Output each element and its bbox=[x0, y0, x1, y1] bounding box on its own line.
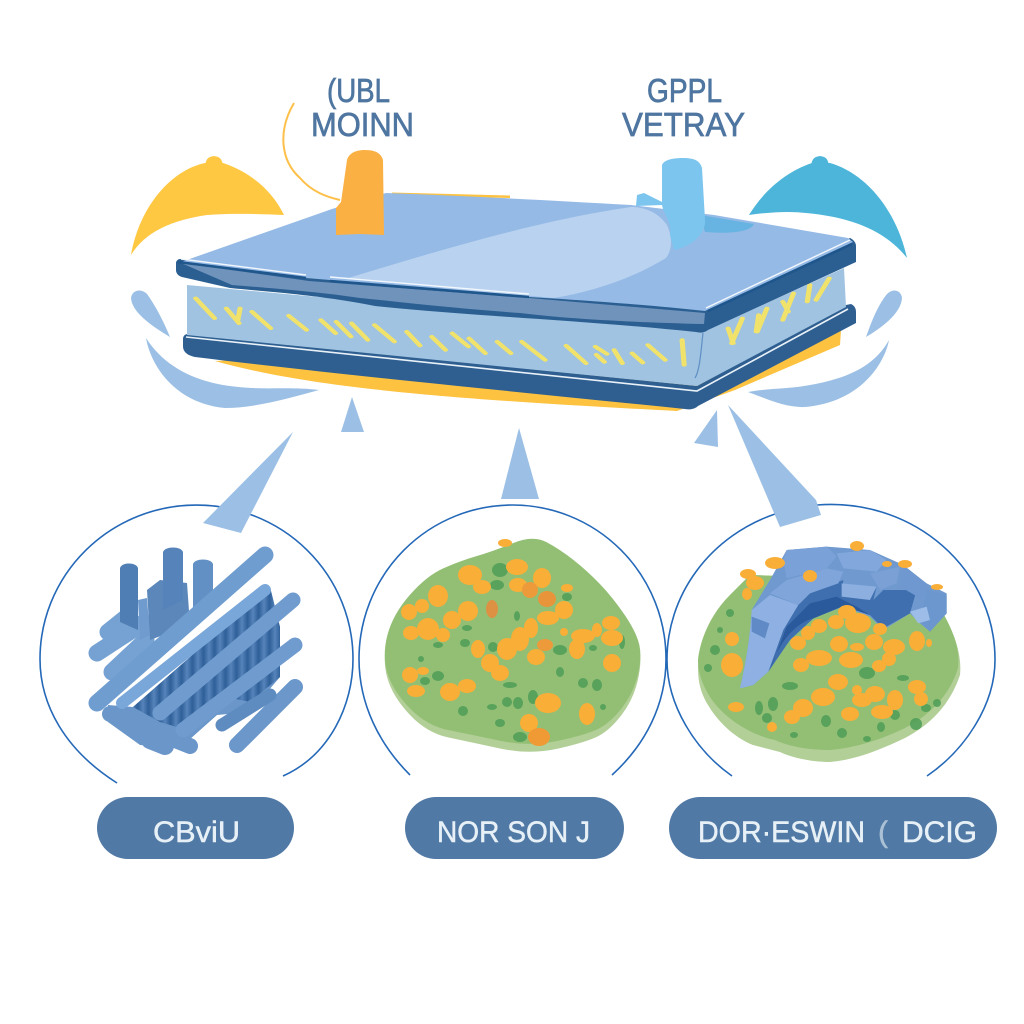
icon: bar lattice bbox=[97, 548, 295, 748]
band seam bbox=[695, 333, 703, 378]
heading: right label: GPPL bbox=[647, 72, 722, 109]
blue shadow patch bbox=[700, 215, 754, 233]
icon: left swoosh bbox=[146, 338, 319, 408]
panel: soil with seeds bbox=[359, 505, 666, 775]
icon: teal dome bbox=[749, 156, 907, 258]
icon: green patch bbox=[385, 539, 640, 752]
panel: soil with rock bbox=[667, 504, 995, 776]
arrow: small right bbox=[694, 410, 718, 447]
panel: structure bbox=[40, 505, 353, 783]
grey-blue front lip bbox=[181, 263, 705, 324]
dark edge lines bbox=[178, 244, 852, 311]
label pill: right: DCIG bbox=[902, 816, 977, 849]
arrow: left large bbox=[203, 432, 293, 533]
top dark band bbox=[176, 238, 856, 333]
heading: left label: MOINN bbox=[311, 106, 414, 143]
label pill: right: ( bbox=[878, 816, 888, 849]
top edge highlight bbox=[181, 240, 850, 308]
label pill: right: DOR·ESWIN bbox=[698, 816, 865, 849]
icon: orange post bbox=[336, 150, 384, 235]
label pill: left bbox=[97, 797, 294, 859]
label pill: right bbox=[669, 797, 997, 859]
dark green spots bbox=[704, 609, 941, 742]
green patch top bbox=[385, 539, 640, 744]
middle translucent band bbox=[187, 268, 846, 386]
light fold on top surface bbox=[345, 207, 671, 298]
yellow flecks bbox=[196, 278, 829, 365]
yellow base layer bbox=[215, 330, 841, 411]
arrow: middle bbox=[501, 428, 539, 499]
icon: left water drop bbox=[131, 291, 170, 337]
circle outline bbox=[40, 505, 353, 783]
orange seeds bbox=[721, 541, 943, 732]
heading: right label bbox=[622, 72, 745, 143]
back yellow sliver bbox=[392, 192, 510, 198]
heading: left label: (UBL bbox=[327, 72, 390, 109]
circle outline bbox=[359, 505, 666, 775]
icon: right water drop bbox=[866, 291, 902, 337]
heading: right label: VETRAY bbox=[622, 106, 745, 143]
arrow: right large bbox=[728, 405, 821, 527]
icon: right swoosh bbox=[748, 340, 889, 407]
rock formation bbox=[740, 547, 947, 688]
label pill: left: CBviU bbox=[153, 816, 240, 849]
label pill: middle: NOR SON J bbox=[437, 816, 590, 849]
arrow: small centre-left bbox=[341, 397, 364, 432]
heading: left label bbox=[311, 72, 414, 143]
circle outline bbox=[667, 504, 995, 776]
icon: green patch bbox=[698, 575, 960, 762]
icon: yellow dome bbox=[131, 156, 284, 255]
bottom dark band bbox=[183, 304, 856, 409]
mattress: layered mat bbox=[176, 192, 856, 411]
label pill: middle bbox=[405, 797, 624, 859]
top surface bbox=[181, 193, 853, 311]
green patch top bbox=[698, 575, 958, 750]
orange thin curve bbox=[283, 103, 340, 200]
dark green spots bbox=[418, 563, 625, 742]
icon: blue post bbox=[636, 158, 705, 250]
orange seeds bbox=[401, 539, 623, 746]
bottom band highlight bbox=[186, 309, 848, 391]
